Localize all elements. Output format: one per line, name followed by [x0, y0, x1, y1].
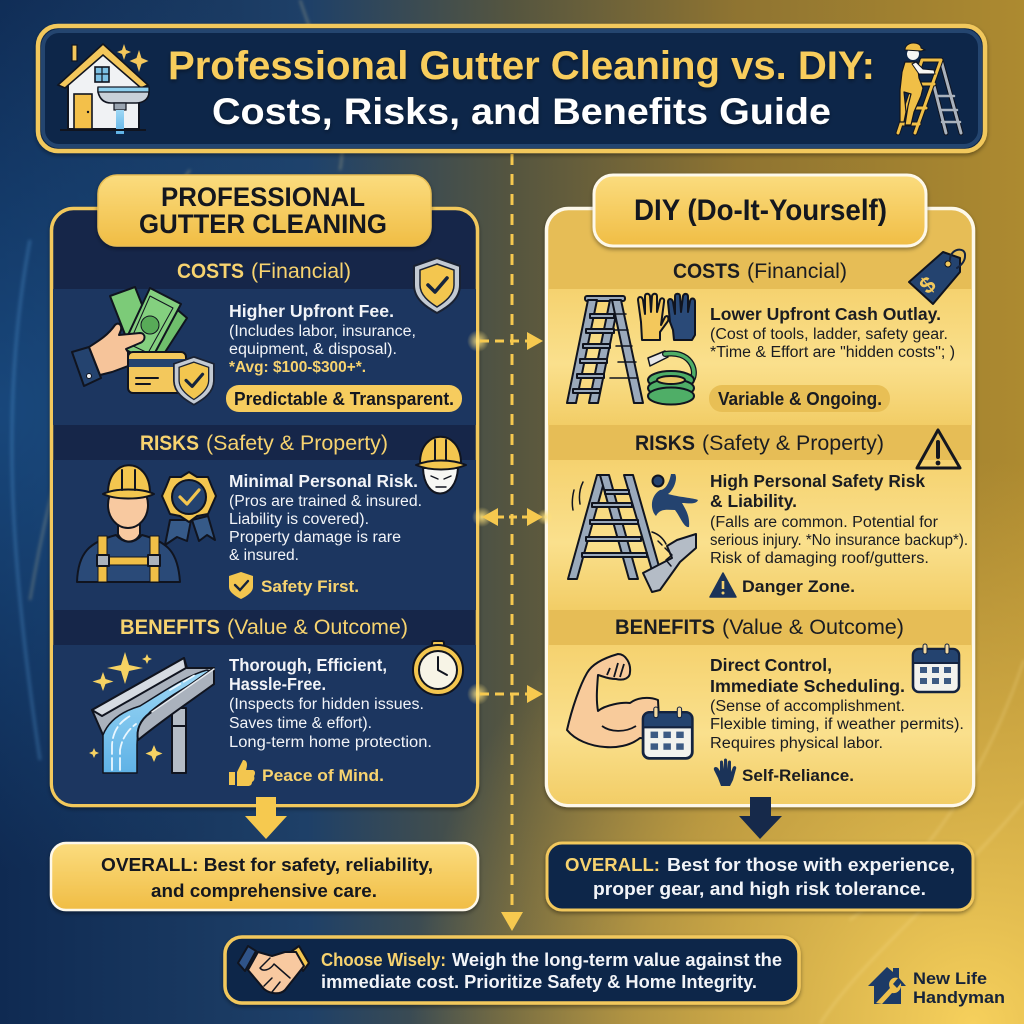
arrow: DIY down to overall	[739, 797, 782, 839]
text: benefits: Hassle-Free.	[229, 674, 326, 694]
icon: shield	[414, 258, 460, 313]
text: risks: High Personal Safety Risk	[710, 471, 925, 491]
section heading: benefits	[615, 616, 904, 639]
text: costs: (Includes labor, insurance,	[229, 323, 416, 340]
icon: clean gutter with water	[89, 652, 214, 773]
title: Professional Gutter Cleaning vs. DIY:	[168, 44, 875, 88]
text: benefits: Immediate Scheduling.	[710, 676, 905, 696]
text: costs: (Cost of tools, ladder, safety gear.	[710, 326, 948, 343]
callout: DIY overall: Best for those with experience,	[667, 854, 955, 875]
text: risks: Risk of damaging roof/gutters.	[710, 550, 929, 567]
text: risks: (Falls are common. Potential for	[710, 514, 938, 531]
text: costs: Lower Upfront Cash Outlay.	[710, 304, 941, 324]
section heading: benefits: (Value & Outcome)	[227, 616, 408, 639]
text: risks: Liability is covered).	[229, 511, 369, 528]
section heading: risks: (Safety & Property)	[702, 432, 884, 455]
text: costs	[710, 304, 955, 361]
text: costs: *Avg: $100-$300+*.	[229, 359, 366, 376]
text: benefits: (Sense of accomplishment.	[710, 698, 905, 715]
section heading: risks: RISKS	[140, 432, 199, 455]
badge: self-reliance: Self-Reliance.	[742, 766, 854, 785]
badge: safety first: Safety First.	[261, 577, 359, 596]
section heading: costs	[177, 260, 351, 283]
header banner	[38, 26, 985, 151]
section heading: risks: (Safety & Property)	[206, 432, 388, 455]
logo: New Life Handyman: New Life	[913, 969, 987, 988]
text: benefits: Flexible timing, if weather permits).	[710, 716, 964, 733]
text: costs	[229, 301, 416, 376]
section heading: costs: COSTS	[673, 260, 740, 283]
heading tab: PROFESSIONAL	[161, 182, 365, 212]
panel: professional gutter cleaning	[52, 175, 478, 806]
icon: price tag	[909, 250, 965, 304]
icon: clock	[413, 641, 463, 695]
icon: worker with award ribbon	[77, 465, 216, 582]
callout: choose wisely: Weigh the long-term value against the	[452, 950, 782, 970]
callout: choose wisely: immediate cost. Prioritize Safety & Home Integrity.	[321, 972, 757, 992]
callout: choose wisely: Choose Wisely:	[321, 950, 446, 970]
panel: DIY	[546, 175, 974, 806]
text: benefits: (Inspects for hidden issues.	[229, 696, 424, 713]
icon: worker on ladder	[898, 43, 961, 133]
arrow: costs comparison	[467, 330, 543, 352]
text: risks: serious injury. *No insurance backup*).	[710, 532, 968, 549]
badge: safety first	[229, 572, 359, 599]
section heading: costs	[673, 260, 847, 283]
badge: variable and ongoing	[709, 385, 890, 412]
text: benefits: Requires physical labor.	[710, 735, 883, 752]
title: Costs, Risks, and Benefits Guide	[212, 91, 831, 132]
badge: peace of mind	[229, 760, 384, 786]
heading tab: GUTTER CLEANING	[139, 209, 387, 239]
text: risks	[710, 471, 968, 567]
section heading: benefits: BENEFITS	[615, 616, 715, 639]
arrow: professional down to overall	[245, 797, 287, 839]
text: costs: Higher Upfront Fee.	[229, 301, 394, 321]
heading tab	[98, 175, 431, 246]
callout: professional overall	[51, 843, 478, 910]
text: risks: & insured.	[229, 547, 299, 564]
title	[168, 44, 875, 132]
section heading: costs: COSTS	[177, 260, 244, 283]
text: costs: equipment, & disposal).	[229, 341, 397, 358]
arrow: benefits comparison	[467, 683, 543, 705]
callout: DIY overall	[547, 843, 973, 910]
icon: cash, card and shield	[72, 287, 187, 393]
icon: ladder, gloves and hose	[567, 294, 695, 404]
arrow: risks comparison	[472, 507, 553, 527]
callout: DIY overall: proper gear, and high risk tolerance.	[593, 878, 926, 899]
section heading: benefits	[120, 616, 408, 639]
icon: handshake	[238, 946, 309, 993]
icon: house with gutter	[58, 44, 149, 134]
text: risks: Property damage is rare	[229, 529, 401, 546]
heading tab: DIY (Do-It-Yourself)	[634, 194, 887, 227]
icon: price tag: $	[914, 271, 941, 299]
text: costs: *Time & Effort are "hidden costs"; )	[710, 344, 955, 361]
text: benefits: Direct Control,	[710, 655, 832, 675]
icon: warning triangle	[917, 430, 960, 468]
section heading: benefits: BENEFITS	[120, 616, 220, 639]
text: benefits: Thorough, Efficient,	[229, 655, 387, 675]
section heading: costs: (Financial)	[251, 260, 351, 283]
logo: New Life Handyman: Handyman	[913, 988, 1005, 1007]
icon: falling ladder and person	[568, 474, 698, 592]
heading tab	[594, 175, 926, 246]
callout: choose wisely	[225, 937, 799, 1003]
callout: professional overall: and comprehensive care.	[151, 880, 377, 901]
badge: danger zone	[710, 573, 855, 597]
text: benefits	[710, 655, 964, 752]
badge: danger zone: Danger Zone.	[742, 577, 855, 596]
badge: peace of mind: Peace of Mind.	[262, 766, 384, 785]
section heading: costs: (Financial)	[747, 260, 847, 283]
icon: flexed arm and calendar	[567, 654, 692, 758]
text: benefits: Long-term home protection.	[229, 734, 432, 751]
section heading: risks: RISKS	[635, 432, 695, 455]
text: benefits: Saves time & effort).	[229, 715, 372, 732]
badge: variable and ongoing: Variable & Ongoing.	[718, 389, 882, 409]
text: risks: Minimal Personal Risk.	[229, 471, 418, 491]
icon: calendar top right	[913, 644, 959, 692]
section heading: benefits: (Value & Outcome)	[722, 616, 904, 639]
center dashed divider arrow	[501, 154, 523, 931]
badge: self-reliance	[714, 758, 854, 786]
text: risks: & Liability.	[710, 491, 797, 511]
logo: New Life Handyman	[868, 967, 1005, 1007]
text: risks: (Pros are trained & insured.	[229, 493, 422, 510]
text: benefits	[229, 655, 432, 751]
badge: predictable and transparent: Predictable & Transparent.	[234, 389, 454, 409]
callout: professional overall: OVERALL: Best for safety, reliability,	[101, 854, 433, 875]
text: risks	[229, 471, 422, 564]
callout: DIY overall: OVERALL:	[565, 854, 660, 875]
icon: hard hat face	[416, 437, 466, 494]
